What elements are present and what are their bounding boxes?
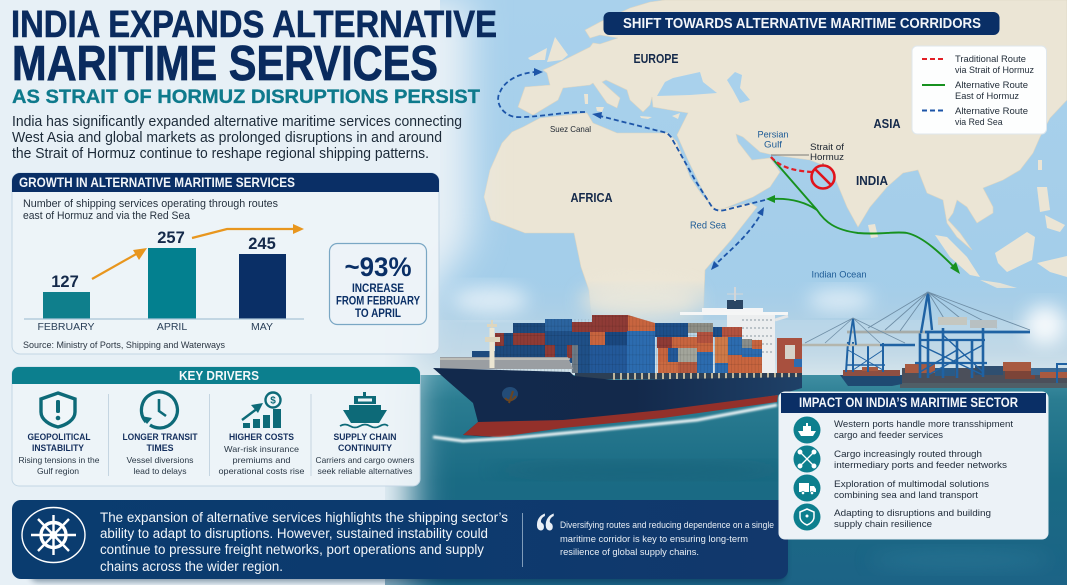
callout: 93 percent increase: TO APRIL: [355, 306, 401, 320]
key drivers header: KEY DRIVERS: [179, 368, 259, 383]
legend: east of Hormuz route: East of Hormuz: [955, 91, 1019, 102]
big crane: [847, 292, 1030, 378]
impact: resilience: supply chain resilience: [834, 519, 932, 530]
map labels: Indian Ocean: [812, 270, 866, 280]
driver: higher costs: HIGHER COSTS: [229, 432, 294, 442]
arrow: february to april: [92, 248, 147, 279]
key drivers header: [12, 367, 420, 384]
title: MARITIME SERVICES: [12, 37, 438, 91]
intro paragraph: the Strait of Hormuz continue to reshape regional shipping patterns.: [12, 145, 429, 162]
sky and clouds: [0, 280, 1067, 377]
impact: intermediary routing: Cargo increasingly routed through: [834, 449, 982, 460]
icon: cargo ship: [340, 392, 388, 428]
impact: western ports: cargo and feeder services: [834, 430, 943, 441]
impact: intermediary routing: [794, 446, 1007, 472]
route: traditional via Hormuz: [771, 157, 813, 172]
driver: supply chain continuity: [316, 392, 414, 476]
title: INDIA EXPANDS ALTERNATIVE: [11, 4, 497, 46]
legend: red sea route: Alternative Route: [955, 106, 1028, 117]
driver: longer transit times: Vessel diversions: [126, 455, 194, 465]
map background: [0, 0, 1067, 320]
growth panel header: [12, 173, 439, 192]
driver: supply chain continuity: seek reliable alternatives: [318, 466, 412, 476]
deck railing: [575, 373, 802, 379]
chart subtitle: Number of shipping services operating through routes: [23, 198, 278, 210]
callout: 93 percent increase: FROM FEBRUARY: [336, 294, 420, 308]
callout: 93 percent increase: ~93%: [344, 252, 412, 282]
intro paragraph: India has significantly expanded alternative maritime services connecting: [12, 113, 462, 130]
icon: rising costs chart: $: [270, 396, 276, 406]
route: via Red Sea to Europe: [498, 72, 765, 266]
icon: shield: [41, 393, 75, 427]
map labels: INDIA: [856, 173, 889, 188]
title: [11, 4, 497, 108]
map labels: EUROPE: [634, 51, 679, 66]
intro paragraph: [12, 113, 462, 162]
banner: conclusion and quote: [12, 500, 788, 582]
port containers: [900, 362, 1067, 388]
superstructure: [680, 287, 788, 373]
driver: supply chain continuity: Carriers and cargo owners: [316, 455, 414, 465]
impact: western ports: Western ports handle more transshipment: [834, 419, 1013, 430]
impact: multimodal: combining sea and land transport: [834, 490, 978, 501]
driver: higher costs: premiums and: [232, 455, 291, 465]
leader lines: [771, 155, 823, 168]
legend: traditional route: Traditional Route: [955, 54, 1026, 65]
arrow: april to may: [192, 224, 304, 238]
driver: geopolitical instability: Rising tensions in the: [18, 455, 100, 465]
arrowheads: [534, 68, 764, 270]
icon: no-entry at Hormuz: [812, 166, 834, 188]
icon: ship wheel: [22, 508, 85, 562]
legend: red sea route: [922, 106, 1028, 128]
driver: longer transit times: [122, 392, 198, 476]
legend: red sea route: via Red Sea: [955, 117, 1003, 128]
map labels: Gulf: [764, 140, 782, 150]
hull: [433, 368, 802, 437]
legend: east of Hormuz route: [922, 80, 1028, 102]
bar chart: [24, 229, 304, 333]
driver: supply chain continuity: CONTINUITY: [338, 443, 392, 453]
impact: resilience: [794, 504, 991, 530]
map labels: Persian: [758, 130, 788, 140]
left fade: [0, 0, 470, 585]
small ship: [840, 375, 902, 386]
panel: key drivers: [12, 367, 420, 486]
bar chart: APRIL: [157, 321, 187, 333]
bar chart: 127: [51, 273, 79, 291]
map labels: AFRICA: [570, 190, 613, 205]
banner text: The expansion of alternative services highlights the shipping sector’s: [100, 510, 508, 525]
driver: geopolitical instability: Gulf region: [37, 466, 79, 476]
impact header: IMPACT ON INDIA’S MARITIME SECTOR: [799, 395, 1018, 410]
cranes and port: [800, 292, 1067, 388]
containers: [472, 315, 802, 373]
map labels: Red Sea: [690, 220, 726, 232]
driver: geopolitical instability: GEOPOLITICAL: [28, 432, 91, 442]
route: east of Hormuz: [771, 157, 957, 270]
forward deck and mast: [440, 320, 573, 369]
banner text: chains across the wider region.: [100, 559, 283, 574]
impact: resilience: Adapting to disruptions and building: [834, 508, 991, 519]
map legend: [912, 46, 1046, 134]
anchor: [502, 387, 518, 403]
map routes: [498, 68, 960, 274]
banner text: ability to adapt to disruptions. However, sustained instability could: [100, 526, 488, 541]
inland seas: [657, 72, 750, 103]
callout: 93 percent increase: [330, 244, 426, 324]
driver: geopolitical instability: [18, 393, 100, 476]
quote: resilience of global supply chains.: [560, 547, 699, 558]
title: AS STRAIT OF HORMUZ DISRUPTIONS PERSIST: [12, 86, 480, 108]
land: islands: [528, 37, 1067, 288]
impact: intermediary routing: intermediary ports and feeder networks: [834, 460, 1007, 471]
driver: higher costs: operational costs rise: [218, 466, 305, 476]
map labels: Hormuz: [810, 152, 844, 163]
small crane: [800, 318, 915, 372]
driver: higher costs: [218, 392, 305, 476]
banner text: continue to pressure freight networks, port operations and supply: [100, 542, 484, 557]
intro paragraph: West Asia and global markets as prolonged disruptions in and around: [12, 129, 442, 146]
legend: traditional route: [922, 54, 1034, 76]
land: Africa: [484, 113, 757, 320]
legend: traditional route: via Strait of Hormuz: [955, 65, 1034, 76]
driver: longer transit times: lead to delays: [134, 466, 186, 476]
sea: [0, 375, 1067, 585]
bar chart: FEBRUARY: [38, 321, 94, 333]
quote: maritime corridor is key to ensuring long-term: [560, 534, 748, 545]
growth panel header: GROWTH IN ALTERNATIVE MARITIME SERVICES: [19, 175, 295, 190]
banner text: [100, 510, 508, 574]
impact: western ports: [794, 416, 1013, 444]
legend: east of Hormuz route: Alternative Route: [955, 80, 1028, 91]
map title pill: SHIFT TOWARDS ALTERNATIVE MARITIME CORRIDORS: [623, 16, 981, 32]
quote: [535, 502, 774, 564]
panel: growth in alternative maritime services: [12, 173, 439, 354]
bar chart: MAY: [251, 321, 273, 333]
impact header: [781, 393, 1046, 413]
driver: longer transit times: TIMES: [146, 443, 174, 453]
source: Source: Ministry of Ports, Shipping and Waterways: [23, 340, 225, 351]
chart subtitle: [23, 198, 278, 222]
chart subtitle: east of Hormuz and via the Red Sea: [23, 210, 191, 222]
quote: Diversifying routes and reducing dependence on a single: [560, 520, 774, 531]
map title pill: [604, 12, 1000, 35]
impact: multimodal: [794, 474, 989, 502]
map labels: Suez Canal: [550, 124, 591, 134]
bar chart: 257: [157, 229, 185, 247]
icon: clock: [141, 392, 177, 428]
container ship: [433, 287, 802, 441]
driver: supply chain continuity: SUPPLY CHAIN: [334, 432, 396, 442]
map labels: Strait of: [810, 142, 844, 153]
quote: “: [535, 502, 555, 564]
boot topping: [463, 395, 778, 437]
bar chart: 245: [248, 235, 276, 253]
wake: [433, 405, 777, 441]
driver: higher costs: War-risk insurance: [224, 444, 299, 454]
callout: 93 percent increase: INCREASE: [352, 281, 404, 295]
impact: multimodal: Exploration of multimodal solutions: [834, 479, 989, 490]
driver: geopolitical instability: INSTABILITY: [32, 443, 84, 453]
map labels: ASIA: [874, 116, 901, 131]
panel: impact on India's maritime sector: [779, 392, 1048, 539]
map labels: [550, 51, 901, 280]
driver: longer transit times: LONGER TRANSIT: [122, 432, 198, 442]
land: Eurasia: [518, 0, 1067, 250]
